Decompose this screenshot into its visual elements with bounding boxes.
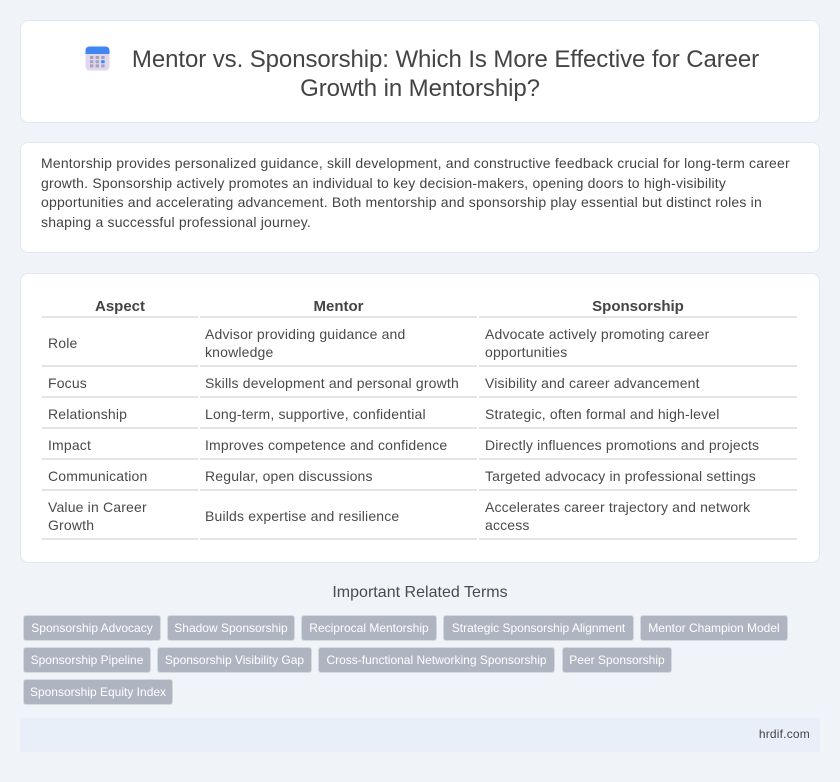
row: relationship bbox=[42, 406, 797, 429]
intro paragraph: growth. Sponsorship actively promotes an individual to key decision-makers, opening doors to high-visibility bbox=[41, 175, 726, 191]
intro paragraph: shaping a successful professional journey. bbox=[41, 214, 311, 230]
intro paragraph bbox=[41, 155, 790, 230]
table header: Mentor bbox=[314, 298, 364, 315]
row: role: knowledge bbox=[205, 344, 273, 360]
row: impact: Directly influences promotions and projects bbox=[485, 437, 759, 453]
tag: Shadow Sponsorship bbox=[174, 621, 288, 635]
tag bbox=[23, 647, 151, 673]
row: role: opportunities bbox=[485, 344, 567, 360]
panel: comparison table bbox=[20, 273, 820, 563]
table header bbox=[42, 298, 797, 318]
title: Growth in Mentorship? bbox=[300, 75, 540, 102]
tag bbox=[562, 647, 672, 673]
row: impact: Improves competence and confidence bbox=[205, 437, 447, 453]
heading: important related terms: Important Related Terms bbox=[332, 584, 508, 601]
header panel bbox=[20, 20, 820, 123]
row: value in career growth: Accelerates career trajectory and network bbox=[485, 499, 750, 515]
panel: intro text bbox=[20, 142, 820, 253]
row: communication: Targeted advocacy in professional settings bbox=[485, 468, 756, 484]
intro paragraph: Mentorship provides personalized guidance, skill development, and constructive feedback crucial for long-term career bbox=[41, 155, 790, 171]
footer site name: hrdif.com bbox=[759, 727, 810, 741]
tag bbox=[23, 615, 161, 641]
row: focus bbox=[42, 375, 797, 398]
row: impact bbox=[42, 437, 797, 460]
intro paragraph: opportunities and accelerating advancement. Both mentorship and sponsorship play essential but distinct roles in bbox=[41, 194, 762, 210]
row: role: Role bbox=[48, 335, 77, 351]
tag: Reciprocal Mentorship bbox=[309, 621, 429, 635]
tag: Cross-functional Networking Sponsorship bbox=[326, 653, 547, 667]
related terms tags bbox=[23, 615, 788, 705]
tag: Sponsorship Visibility Gap bbox=[165, 653, 304, 667]
tag: Sponsorship Pipeline bbox=[31, 653, 143, 667]
row: focus: Skills development and personal growth bbox=[205, 375, 459, 391]
row: role: Advisor providing guidance and bbox=[205, 326, 405, 342]
row: relationship: Relationship bbox=[48, 406, 127, 422]
tag bbox=[640, 615, 788, 641]
tag: Sponsorship Advocacy bbox=[31, 621, 153, 635]
tag: Mentor Champion Model bbox=[648, 621, 780, 635]
footer bar bbox=[20, 718, 820, 752]
tag bbox=[443, 615, 634, 641]
row: focus: Focus bbox=[48, 375, 87, 391]
row: value in career growth: access bbox=[485, 517, 530, 533]
row: focus: Visibility and career advancement bbox=[485, 375, 700, 391]
tag: Peer Sponsorship bbox=[569, 653, 665, 667]
title bbox=[132, 46, 759, 102]
tag bbox=[301, 615, 437, 641]
row: relationship: Long-term, supportive, confidential bbox=[205, 406, 426, 422]
tag bbox=[167, 615, 295, 641]
row: value in career growth bbox=[42, 499, 797, 540]
tag bbox=[23, 679, 173, 705]
tag: Strategic Sponsorship Alignment bbox=[452, 621, 625, 635]
table header: Aspect bbox=[95, 298, 145, 315]
row: role: Advocate actively promoting career bbox=[485, 326, 709, 342]
tag bbox=[157, 647, 312, 673]
tag: Sponsorship Equity Index bbox=[30, 685, 166, 699]
row: role bbox=[42, 326, 797, 367]
icon: calendar bbox=[86, 46, 110, 70]
row: value in career growth: Builds expertise and resilience bbox=[205, 508, 399, 524]
row: communication: Communication bbox=[48, 468, 147, 484]
row: communication bbox=[42, 468, 797, 491]
table header: Sponsorship bbox=[592, 298, 684, 315]
row: relationship: Strategic, often formal and high-level bbox=[485, 406, 719, 422]
row: impact: Impact bbox=[48, 437, 91, 453]
tag bbox=[318, 647, 555, 673]
row: communication: Regular, open discussions bbox=[205, 468, 373, 484]
title: Mentor vs. Sponsorship: Which Is More Effective for Career bbox=[132, 46, 759, 73]
row: value in career growth: Value in Career bbox=[48, 499, 147, 515]
row: value in career growth: Growth bbox=[48, 517, 94, 533]
